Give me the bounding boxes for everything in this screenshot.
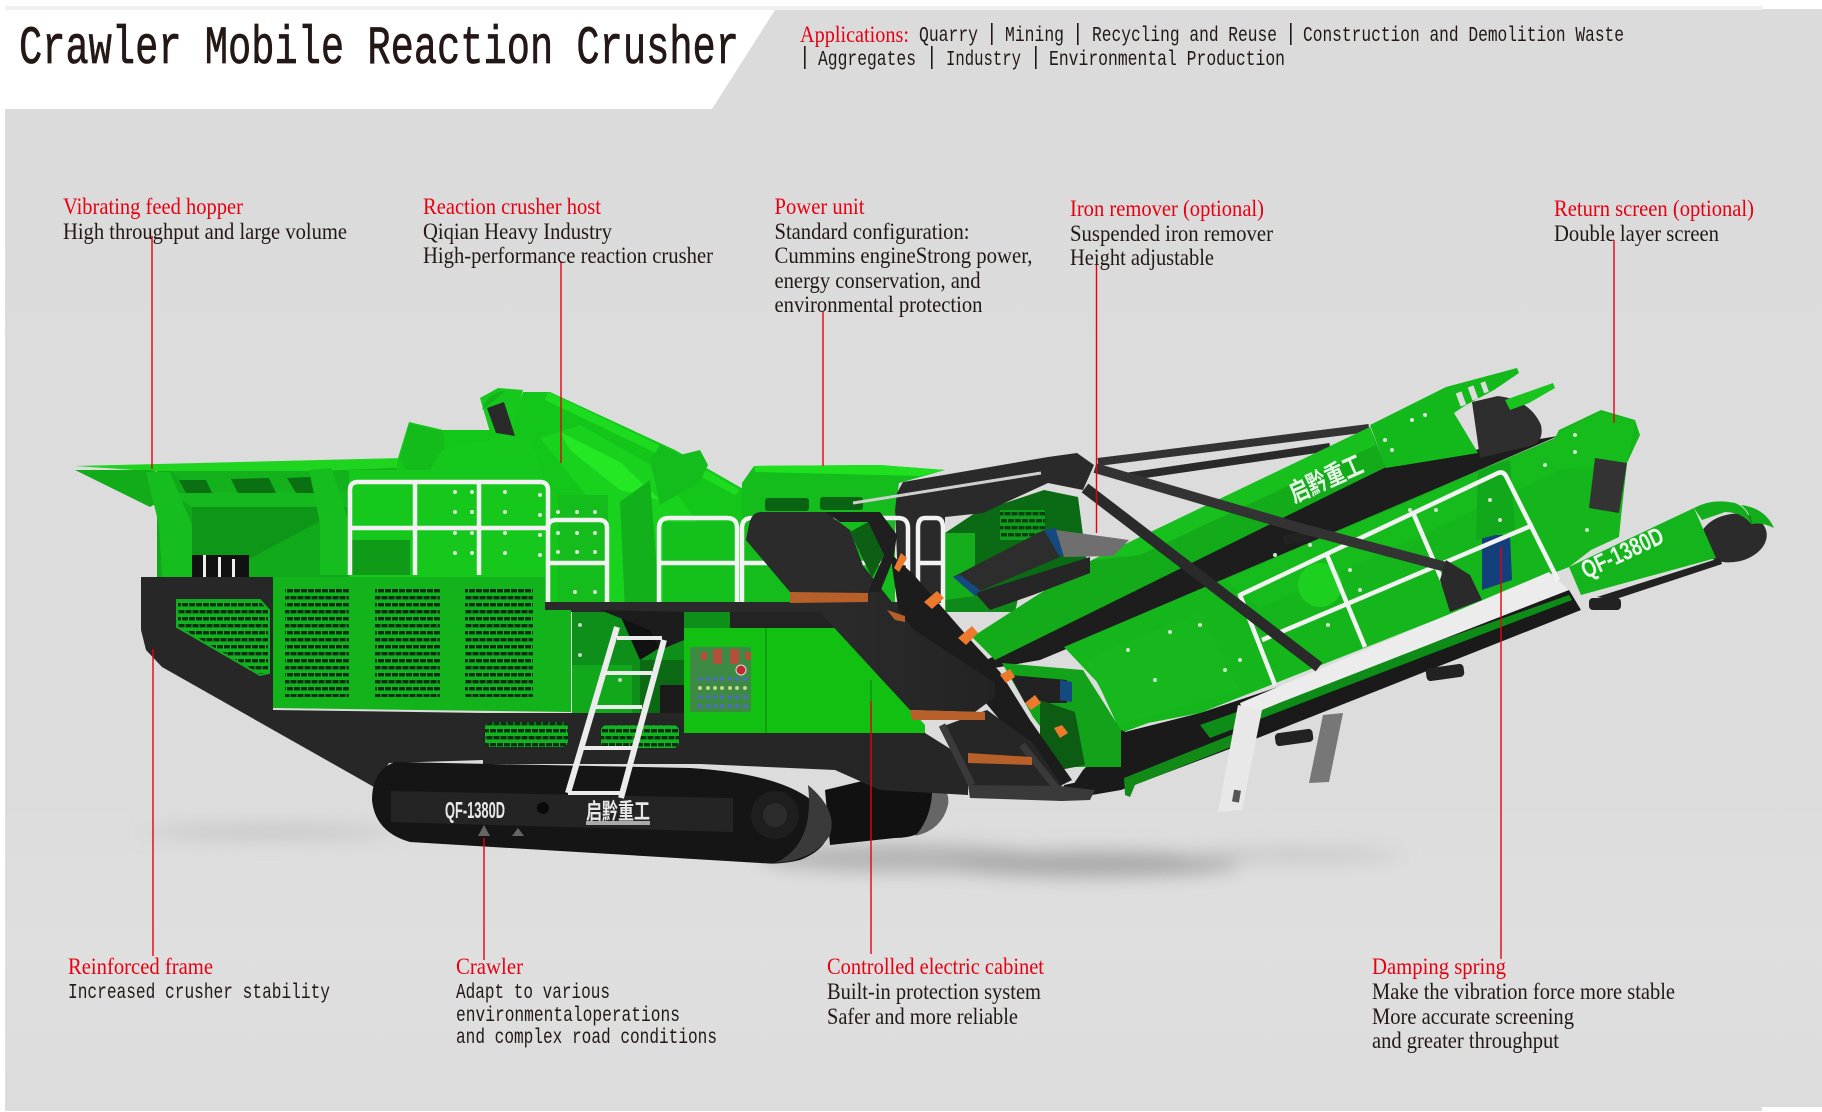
callout: return screen [1554, 196, 1754, 246]
green engine enclosure with vents [273, 577, 571, 712]
callout: return screen: Return screen (optional) [1554, 196, 1754, 221]
controlled electric cabinet [684, 628, 925, 733]
black chassis [141, 577, 968, 795]
callout: power unit [774, 194, 1032, 317]
title banner [5, 10, 775, 109]
lower frame [1063, 590, 1581, 800]
callout: crawler: Adapt to various [456, 982, 610, 1005]
callout: reaction crusher host: Qiqian Heavy Industry [423, 219, 612, 244]
platform bar [545, 602, 900, 612]
applications list: Construction and Demolition Waste [1303, 25, 1624, 48]
black boom arm [853, 453, 1482, 667]
callout: vibrating feed hopper [63, 194, 347, 244]
callout: reinforced frame [68, 954, 330, 1005]
callout: controlled electric cabinet: Built-in protection system [827, 979, 1041, 1004]
title: Crawler Mobile Reaction Crusher [19, 19, 739, 80]
brand on conveyor: 启黔重工 [1284, 449, 1368, 508]
callout: reaction crusher host [423, 194, 713, 268]
ladder [568, 627, 664, 798]
return conveyor [1569, 501, 1774, 600]
callout: power unit: environmental protection [774, 292, 983, 317]
callout: iron remover [1070, 196, 1273, 270]
right railing [1240, 472, 1558, 685]
callout: reaction crusher host: Reaction crusher host [423, 194, 602, 219]
callout: controlled electric cabinet [827, 954, 1045, 1029]
applications list: Environmental Production [1049, 49, 1285, 72]
vibrating screen box [1064, 410, 1640, 733]
conveyor drum [1472, 396, 1542, 458]
leader line: vibrating feed hopper [151, 236, 153, 469]
chassis vent [177, 600, 269, 675]
ground shadow [145, 826, 1400, 877]
leader line: damping spring [1500, 547, 1502, 959]
support legs [1218, 705, 1343, 812]
leader line: iron remover [1096, 265, 1098, 533]
callout: crawler: and complex road conditions [456, 1027, 717, 1050]
right screen: strut behind [1098, 428, 1369, 477]
applications list: Recycling and Reuse [1092, 25, 1277, 48]
orange rollers [790, 592, 1032, 765]
lower vents [485, 722, 568, 747]
callout: damping spring: Make the vibration force more stable [1372, 979, 1675, 1004]
iron remover magnet [953, 528, 1129, 610]
callout: damping spring: More accurate screening [1372, 1004, 1574, 1029]
callout: power unit: Cummins engineStrong power, [774, 243, 1032, 268]
track brand label: 启黔重工 [586, 799, 650, 824]
callout: power unit: energy conservation, and [774, 268, 981, 293]
applications list: Industry [946, 49, 1021, 72]
walkway [1240, 572, 1569, 717]
callout: crawler [456, 954, 717, 1050]
right upper conveyor and screen [955, 368, 1774, 812]
frame below belt [968, 785, 1095, 801]
applications list: Aggregates [818, 49, 916, 72]
leader line: reaction crusher host [560, 262, 562, 463]
return conveyor: QF-1380D [1577, 522, 1668, 584]
crawler track [372, 762, 832, 864]
lower screen drive [1002, 663, 1130, 800]
diagonal belt [890, 553, 1072, 786]
lower crusher frame [572, 610, 732, 715]
upper conveyor [972, 368, 1555, 660]
leader line: controlled electric cabinet [870, 701, 872, 954]
callout: crawler: environmentaloperations [456, 1005, 680, 1028]
callout: power unit: Standard configuration: [774, 219, 970, 244]
callout: iron remover: Suspended iron remover [1070, 221, 1273, 246]
callout: reinforced frame: Reinforced frame [68, 954, 213, 979]
callout: crawler: Crawler [456, 954, 523, 979]
leader line: return screen [1613, 240, 1615, 423]
left railings [350, 482, 943, 610]
callout: reinforced frame: Increased crusher stability [68, 982, 330, 1005]
callout: iron remover: Height adjustable [1070, 245, 1214, 270]
damping springs [1274, 531, 1621, 747]
head drum [746, 512, 872, 592]
iron remover and engine area [945, 490, 1090, 612]
track model label: QF-1380D [445, 797, 505, 823]
applications list: Mining [1005, 25, 1064, 48]
callout: vibrating feed hopper: High throughput and large volume [63, 219, 347, 244]
leader line: reinforced frame [152, 649, 154, 956]
applications list: Applications: [800, 22, 909, 47]
callout: power unit: Power unit [774, 194, 865, 219]
callout: vibrating feed hopper: Vibrating feed hopper [63, 194, 243, 219]
callout: return screen: Double layer screen [1554, 221, 1719, 246]
callout: damping spring: and greater throughput [1372, 1028, 1560, 1053]
crusher machine illustration [75, 368, 1774, 864]
control panel [690, 647, 751, 712]
callout: iron remover: Iron remover (optional) [1070, 196, 1264, 221]
reaction crusher host [349, 388, 745, 612]
leader line: power unit [822, 312, 824, 466]
hopper [75, 458, 414, 577]
leader line: crawler [483, 838, 485, 960]
rear track wheel [825, 770, 948, 845]
callout: controlled electric cabinet: Safer and more reliable [827, 1004, 1018, 1029]
feed conveyor [746, 512, 1130, 801]
power unit [742, 465, 945, 612]
callout: damping spring: Damping spring [1372, 954, 1506, 979]
drum frame [825, 512, 897, 592]
applications list [800, 22, 1624, 72]
callout: reaction crusher host: High-performance reaction crusher [423, 243, 713, 268]
dark support strip [955, 436, 1558, 675]
applications list: Quarry [919, 25, 978, 48]
callout: controlled electric cabinet: Controlled electric cabinet [827, 954, 1045, 979]
callout: damping spring [1372, 954, 1675, 1053]
